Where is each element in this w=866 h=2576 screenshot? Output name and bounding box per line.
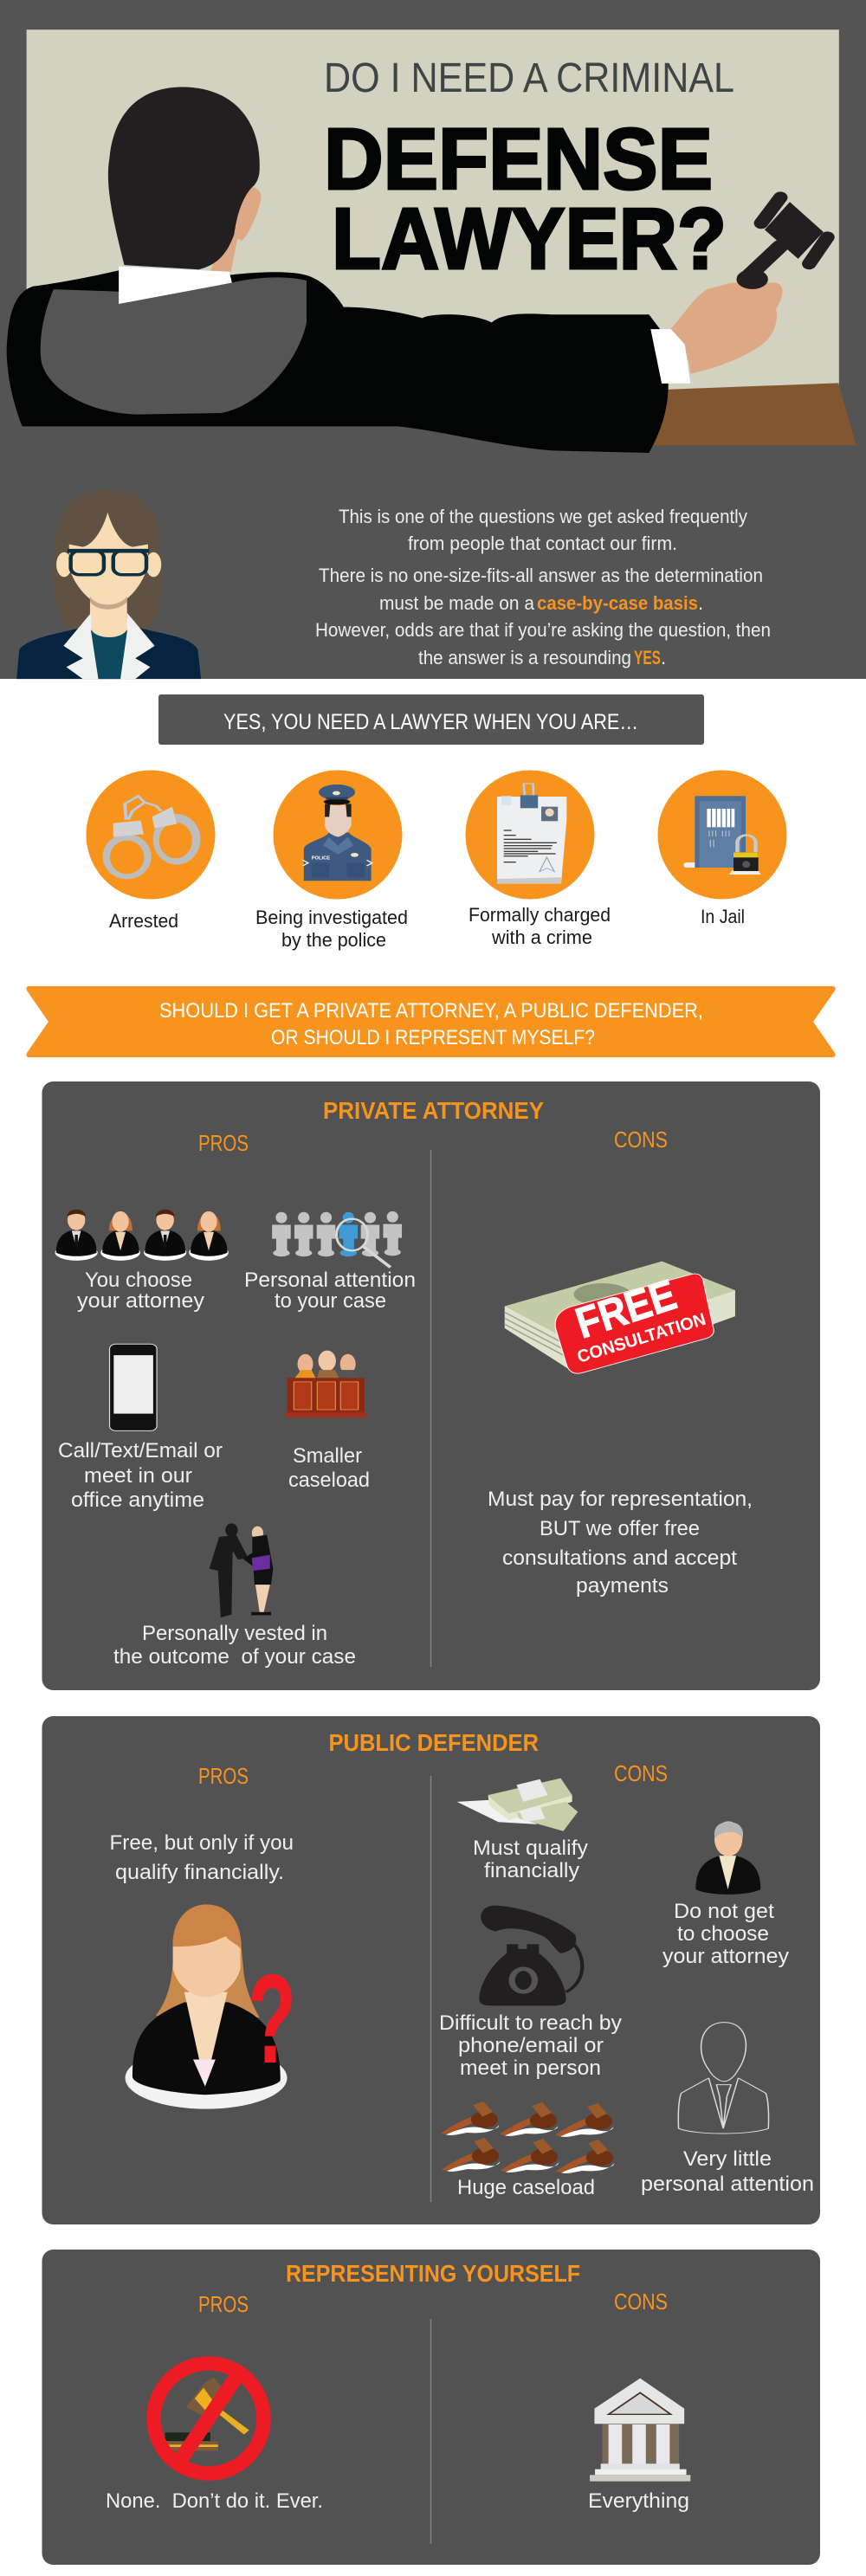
cons text: Must qualify — [473, 1837, 588, 1860]
intro text: must be made on a — [379, 592, 535, 614]
pros text — [58, 1269, 416, 1669]
pros text: Personally vested in — [142, 1622, 327, 1645]
cons text: phone/email or — [458, 2034, 604, 2057]
pros text: Personal attention — [244, 1269, 416, 1292]
title: DO I NEED A CRIMINAL — [324, 55, 734, 101]
pros text: meet in our — [84, 1464, 192, 1488]
icon: jail door and padlock — [658, 771, 786, 899]
intro text: However, odds are that if you’re asking the question, then — [315, 619, 771, 641]
situation labels: Formally charged — [469, 904, 611, 926]
icon: stacks of cash — [457, 1779, 578, 1831]
cons text: Difficult to reach by — [439, 2011, 622, 2035]
intro text: YES — [634, 647, 661, 668]
cons text — [439, 1837, 814, 2199]
cons heading: CONS — [614, 2289, 668, 2315]
icon: police officer — [274, 771, 402, 899]
pros text: office anytime — [71, 1488, 204, 1512]
cons text: Do not get — [674, 1900, 774, 1923]
icon: handcuffs — [87, 771, 215, 899]
situation labels: by the police — [281, 929, 386, 951]
heading: private attorney: PRIVATE ATTORNEY — [323, 1097, 544, 1124]
icon: rotary telephone — [479, 1906, 582, 2005]
pros heading: PROS — [198, 1763, 249, 1789]
intro text: from people that contact our firm. — [408, 533, 677, 554]
heading: representing yourself: REPRESENTING YOURSELF — [286, 2260, 580, 2287]
panel: private attorney — [42, 1081, 820, 1690]
pros text: to your case — [275, 1289, 386, 1313]
pros heading: PROS — [198, 1130, 249, 1156]
title: DEFENSE — [324, 111, 713, 208]
cons text: consultations and accept — [502, 1546, 737, 1570]
icon: six gavels — [441, 2101, 614, 2173]
pros text: the outcome of your case — [113, 1645, 356, 1669]
panel: representing yourself — [42, 2250, 820, 2565]
cons text — [488, 1488, 753, 1598]
title: LAWYER? — [332, 190, 727, 287]
cons heading: CONS — [614, 1760, 668, 1786]
pros text: You choose — [85, 1269, 192, 1292]
situation labels — [109, 904, 745, 951]
pros text: caseload — [288, 1469, 370, 1492]
pros text: Smaller — [293, 1444, 362, 1468]
situation labels: In Jail — [701, 906, 745, 927]
pros heading: PROS — [198, 2291, 249, 2317]
title — [324, 55, 734, 287]
icon: charge document — [466, 771, 594, 899]
icon: woman public defender with question mark — [126, 1905, 296, 2109]
cons text: Very little — [683, 2147, 772, 2171]
heading bar: yes you need a lawyer — [158, 694, 704, 745]
cons text: Must pay for representation, — [488, 1488, 753, 1511]
intro text: . — [661, 647, 666, 668]
pros text: Free, but only if you — [109, 1831, 294, 1855]
cons text: Everything — [588, 2489, 689, 2513]
intro text: There is no one-size-fits-all answer as the determination — [319, 565, 763, 586]
icon: jury panel — [286, 1351, 366, 1417]
icon: outline of man — [678, 2023, 769, 2134]
intro text: . — [698, 592, 703, 614]
banner: should I get a private attorney — [26, 986, 836, 1057]
pros text: your attorney — [77, 1289, 204, 1313]
cons text: payments — [576, 1574, 669, 1598]
cons text: Huge caseload — [457, 2176, 595, 2199]
cons text: meet in person — [460, 2056, 601, 2080]
situation labels: Arrested — [109, 910, 178, 932]
icon: cash with free consultation badge: CONSULTATION — [575, 1310, 708, 1367]
pros text — [109, 1831, 294, 1884]
pros text: qualify financially. — [115, 1861, 284, 1884]
illustration: lawyer raising gavel at the bench — [7, 29, 856, 453]
icon: woman public defender with question mark: ? — [248, 1948, 296, 2089]
cons text: personal attention — [641, 2172, 814, 2196]
situation labels: Being investigated — [255, 907, 408, 928]
icon: police officer: POLICE — [312, 855, 330, 861]
icon: woman attorney with glasses — [16, 489, 201, 679]
intro text: This is one of the questions we get asked frequently — [339, 506, 747, 527]
banner: should I get a private attorney: OR SHOULD I REPRESENT MYSELF? — [271, 1026, 595, 1049]
cons text: your attorney — [662, 1945, 789, 1968]
icon: smartphone — [110, 1344, 157, 1430]
icon: gavel in hand — [737, 197, 827, 289]
panel: public defender — [42, 1716, 820, 2224]
icon: grey haired attorney — [695, 1821, 760, 1895]
heading: public defender: PUBLIC DEFENDER — [329, 1729, 539, 1756]
situation labels: with a crime — [491, 926, 592, 948]
icon: four attorneys — [55, 1210, 229, 1261]
pros text: Call/Text/Email or — [58, 1439, 223, 1462]
intro text: the answer is a resounding — [418, 647, 631, 668]
icon: gavel with prohibition sign — [154, 2364, 263, 2473]
heading bar: yes you need a lawyer: YES, YOU NEED A LAWYER WHEN YOU ARE… — [223, 710, 638, 734]
icon: handshake — [210, 1523, 273, 1617]
intro text: case-by-case basis — [537, 592, 698, 614]
icon: cash with free consultation badge — [505, 1262, 735, 1374]
cons text: BUT we offer free — [540, 1517, 700, 1540]
cons text: financially — [484, 1859, 579, 1882]
icon: crowd with magnifier — [272, 1211, 402, 1268]
panel: situations needing a lawyer — [87, 771, 786, 951]
icon: cash with free consultation badge: FREE — [570, 1270, 682, 1347]
pros text: None. Don’t do it. Ever. — [106, 2489, 323, 2513]
hero section — [0, 0, 866, 679]
banner: should I get a private attorney: SHOULD I GET A PRIVATE ATTORNEY, A PUBLIC DEFENDER, — [159, 999, 703, 1023]
cons text: to choose — [677, 1922, 769, 1946]
cons heading: CONS — [614, 1127, 668, 1152]
icon: courthouse — [590, 2379, 690, 2482]
intro text — [315, 506, 771, 668]
